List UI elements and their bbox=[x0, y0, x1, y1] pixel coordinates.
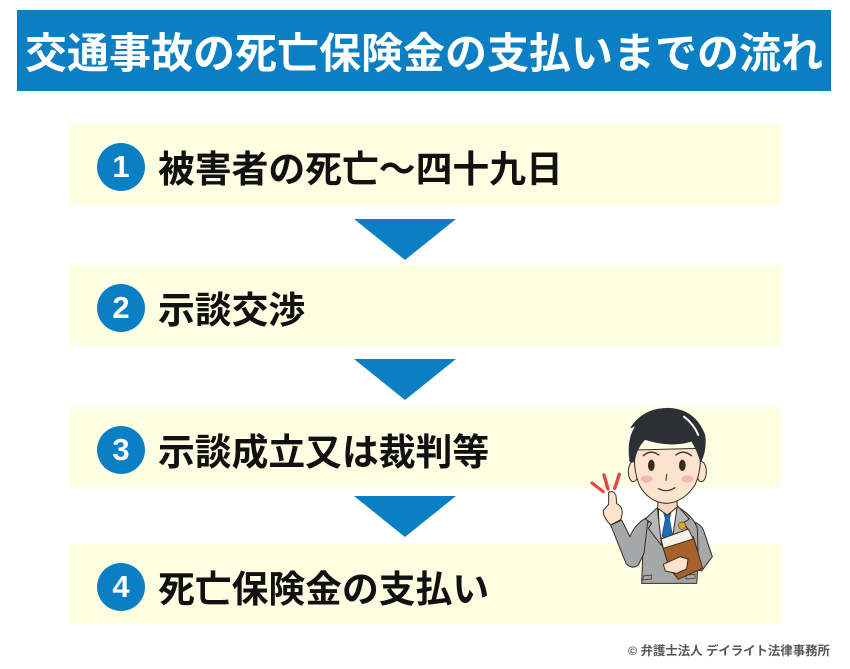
step 1 text: 被害者の死亡〜四十九日 bbox=[158, 149, 563, 190]
step 2 number badge bbox=[97, 284, 145, 332]
hand holding notebook bbox=[663, 557, 688, 573]
arrow: step 2 to 3 bbox=[354, 359, 456, 400]
title banner: 交通事故の死亡保険金の支払いまでの流れ bbox=[25, 30, 823, 77]
step 1 number badge bbox=[97, 143, 145, 191]
right arm bbox=[688, 520, 712, 571]
suit body bbox=[642, 508, 698, 583]
notebook bbox=[662, 537, 703, 579]
step 4 text: 死亡保険金の支払い bbox=[158, 569, 489, 610]
hair highlight bbox=[684, 417, 698, 435]
step 4 number badge: 4 bbox=[112, 569, 130, 604]
tie bbox=[662, 512, 673, 542]
shirt bbox=[658, 505, 679, 545]
title banner bbox=[17, 10, 831, 91]
emphasis marks bbox=[592, 483, 603, 492]
nose bbox=[664, 474, 668, 480]
neck bbox=[658, 497, 677, 515]
pockets bbox=[643, 574, 695, 580]
step 3 panel bbox=[69, 407, 781, 488]
copyright credit: © 弁護士法人 デイライト法律事務所 bbox=[628, 644, 830, 658]
step 1 panel bbox=[69, 124, 781, 205]
arrow: step 1 to 2 bbox=[354, 219, 456, 260]
hair bbox=[629, 408, 705, 462]
face bbox=[634, 448, 700, 503]
step 3 text: 示談成立又は裁判等 bbox=[158, 432, 489, 473]
step 3 number badge bbox=[97, 426, 145, 474]
step 4 number badge bbox=[97, 563, 145, 611]
eyes bbox=[648, 460, 655, 471]
step 2 text: 示談交渉 bbox=[158, 290, 305, 331]
lawyer badge bbox=[678, 522, 686, 529]
left arm bbox=[611, 517, 648, 567]
lapels bbox=[645, 508, 662, 546]
pointing hand bbox=[603, 492, 622, 525]
eyebrows bbox=[643, 452, 659, 456]
step 3 number badge: 3 bbox=[112, 432, 130, 467]
step 1 number badge: 1 bbox=[112, 149, 130, 184]
illustration: lawyer pointing a finger and holding a notebook bbox=[592, 408, 712, 583]
step 2 panel bbox=[69, 265, 781, 346]
arrow: step 3 to 4 bbox=[354, 496, 456, 537]
cheeks bbox=[641, 475, 653, 483]
mouth bbox=[658, 488, 675, 491]
step 4 panel bbox=[69, 544, 781, 624]
step 2 number badge: 2 bbox=[112, 290, 130, 325]
ears bbox=[628, 462, 638, 482]
